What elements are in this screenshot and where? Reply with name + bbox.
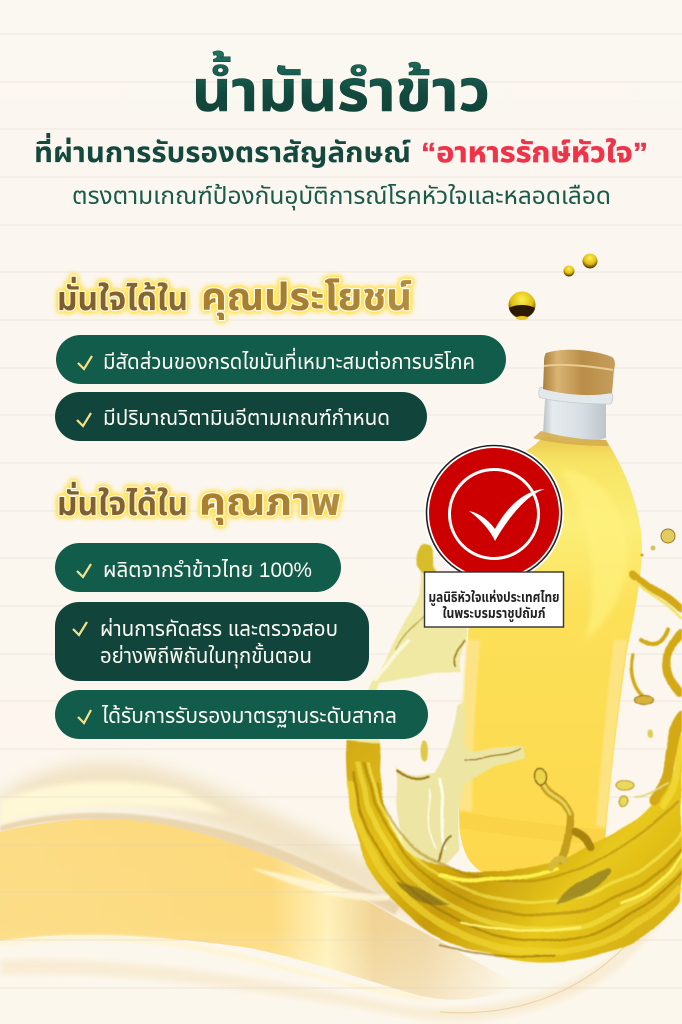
badge: heart-friendly food mark: [424, 443, 564, 627]
pill: thai rice bran: ผลิตจากรำข้าวไทย 100%: [103, 558, 312, 582]
icon: check: [77, 564, 91, 577]
bubbles on left: [417, 544, 437, 575]
title: น้ำมันรำข้าว: [192, 50, 490, 124]
pill: vitamin E: [55, 392, 427, 441]
droplets in splash: [421, 742, 429, 762]
icon: white checkmark: [469, 489, 545, 541]
heading: benefits: คุณประโยชน์: [201, 277, 412, 320]
icon: check: [73, 622, 87, 635]
pill: international standard: ได้รับการรับรองมาตรฐานระดับสากล: [101, 704, 397, 728]
heading: quality: [57, 481, 341, 525]
pill: thai rice bran: [55, 543, 341, 592]
badge: heart-friendly food mark: ในพระบรมราชูปถัมภ์: [442, 605, 546, 623]
pill: selection and inspection: อย่างพิถีพิถันในทุกขั้นตอน: [100, 642, 312, 669]
badge: heart-friendly food mark: มูลนิธิหัวใจแห่งประเทศไทย: [428, 589, 560, 607]
large droplet: [508, 292, 536, 318]
heading: quality: มั่นใจได้ใน: [57, 481, 188, 522]
pill: international standard: [55, 690, 428, 739]
pill: selection and inspection: ผ่านการคัดสรร และตรวจสอบ: [100, 617, 338, 641]
icon: check: [77, 413, 91, 426]
heading: benefits: มั่นใจได้ใน: [57, 276, 188, 317]
red highlighted phrase: “อาหารรักษ์หัวใจ”: [421, 137, 648, 168]
main swirl: [346, 740, 682, 963]
subtitle: certified mark line: [34, 132, 648, 168]
subtitle: certified mark line: ที่ผ่านการรับรองตราสัญลักษณ์: [34, 132, 411, 168]
bottle: [459, 350, 642, 875]
pill: fatty acid ratio: [56, 335, 506, 384]
icon: check: [78, 356, 92, 369]
pale sheet left: [346, 548, 467, 745]
icon: check: [78, 710, 91, 723]
pill: fatty acid ratio: มีสัดส่วนของกรดไขมันที่เหมาะสมต่อการบริโภค: [103, 347, 475, 374]
swirl flow streaks: [350, 760, 682, 957]
oil splash: [346, 544, 682, 963]
inner pale column and arm: [395, 700, 526, 872]
pill: vitamin E: มีปริมาณวิตามินอีตามเกณฑ์กำหนด: [103, 407, 390, 430]
label box: [424, 572, 564, 627]
heading: benefits: [57, 276, 412, 320]
subtitle: criteria line: ตรงตามเกณฑ์ป้องกันอุบัติการณ์โรคหัวใจและหลอดเลือด: [72, 183, 611, 211]
heading: quality: คุณภาพ: [199, 482, 341, 525]
droplets above bottle: [508, 254, 675, 556]
right rising strands: [631, 573, 682, 805]
pill: selection and inspection: [55, 602, 369, 681]
centre rising splash: [541, 778, 590, 868]
